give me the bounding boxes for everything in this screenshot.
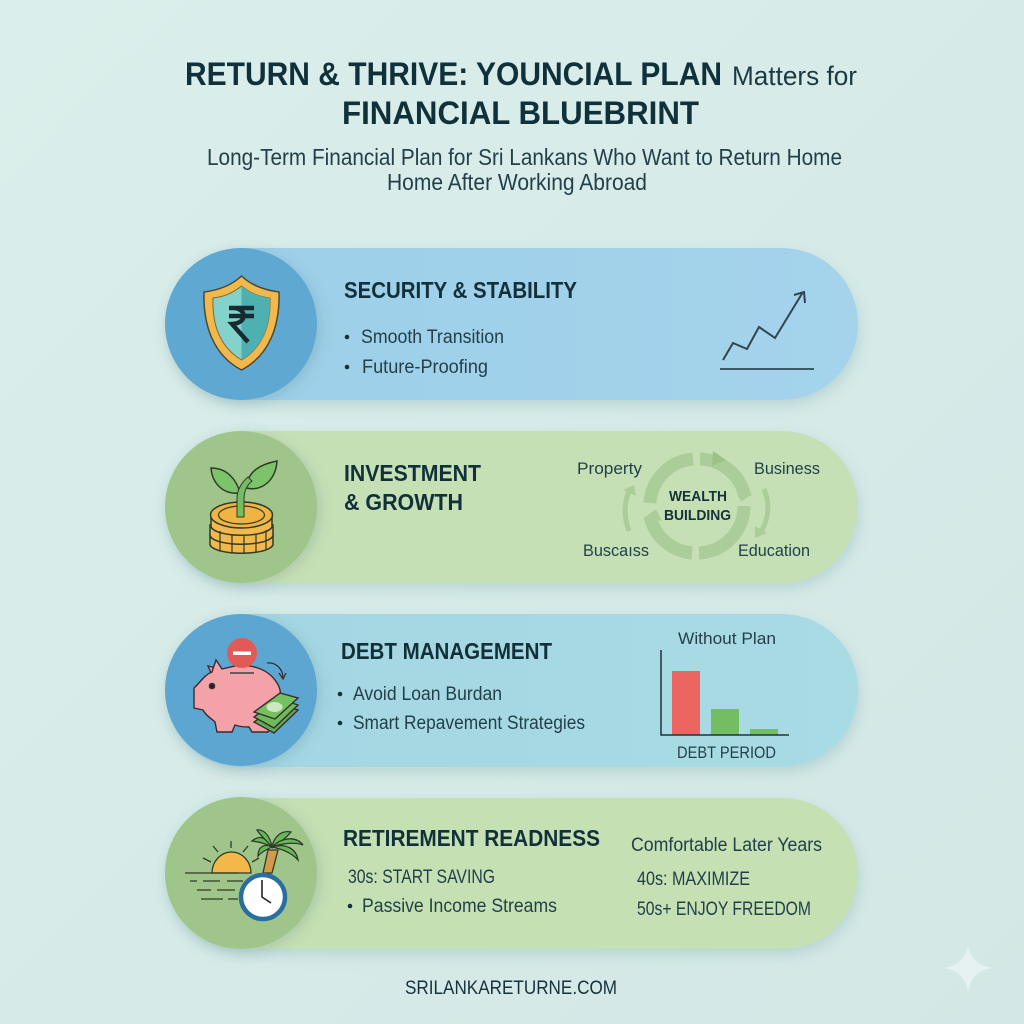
cycle diagram: wealth building: BUILDING [664, 507, 731, 524]
icon: sprout on coins [210, 461, 277, 554]
heading: retirement readiness: RETIREMENT READNESS [343, 825, 600, 851]
heading: investment and growth: INVESTMENT [344, 460, 481, 486]
subtitle: Home After Working Abroad [387, 169, 647, 195]
footer url: SRILANKARETURNE.COM [405, 978, 617, 999]
line chart: rising trend [720, 292, 814, 369]
icon: sparkle watermark [944, 945, 992, 992]
icon: piggy bank with cash [194, 638, 298, 733]
bar chart: debt period: DEBT PERIOD [677, 743, 776, 762]
heading: investment and growth: & GROWTH [344, 489, 463, 515]
title: FINANCIAL BLUEBRINT [342, 95, 699, 131]
panel: security and stability [165, 248, 858, 400]
list: retirement right [631, 835, 822, 920]
title: RETURN & THRIVE: YOUNCIAL PLAN [185, 56, 722, 92]
bullet list: security: Future-Proofing [362, 357, 488, 378]
bullet list: debt [338, 684, 585, 734]
icon: sunset, palm and clock [185, 830, 303, 919]
list: retirement right: 50s+ ENJOY FREEDOM [637, 899, 811, 920]
heading: debt management: DEBT MANAGEMENT [341, 638, 552, 664]
bullet list: security: Smooth Transition [361, 327, 504, 348]
title [185, 56, 857, 131]
cycle diagram: wealth building: Property [577, 459, 643, 478]
list: retirement left: 30s: START SAVING [348, 867, 495, 888]
panel: investment and growth [165, 431, 858, 583]
list: retirement left [348, 867, 557, 917]
list: retirement right: 40s: MAXIMIZE [637, 869, 750, 890]
bar chart: debt period: Without Plan [678, 629, 776, 648]
panel: debt management [165, 614, 858, 767]
icon: rupee shield [204, 276, 279, 370]
list: retirement right: Comfortable Later Years [631, 835, 822, 856]
heading: security and stability: SECURITY & STABILITY [344, 277, 577, 303]
bar chart: debt period [661, 629, 789, 762]
bullet list: security [345, 327, 504, 378]
cycle diagram: wealth building: Business [754, 459, 820, 478]
title: Matters for [732, 61, 857, 91]
bullet list: debt: Smart Repavement Strategies [353, 713, 585, 734]
panel: retirement readiness [165, 797, 858, 949]
cycle diagram: wealth building: Education [738, 541, 810, 560]
subtitle: Long-Term Financial Plan for Sri Lankans Who Want to Return Home [207, 144, 842, 170]
cycle diagram: wealth building [577, 451, 820, 560]
list: retirement left: Passive Income Streams [362, 896, 557, 917]
subtitle [207, 144, 842, 195]
cycle diagram: wealth building: WEALTH [669, 488, 727, 505]
bullet list: debt: Avoid Loan Burdan [353, 684, 502, 705]
cycle diagram: wealth building: Buscaıss [583, 541, 649, 560]
heading: investment and growth [344, 460, 481, 515]
